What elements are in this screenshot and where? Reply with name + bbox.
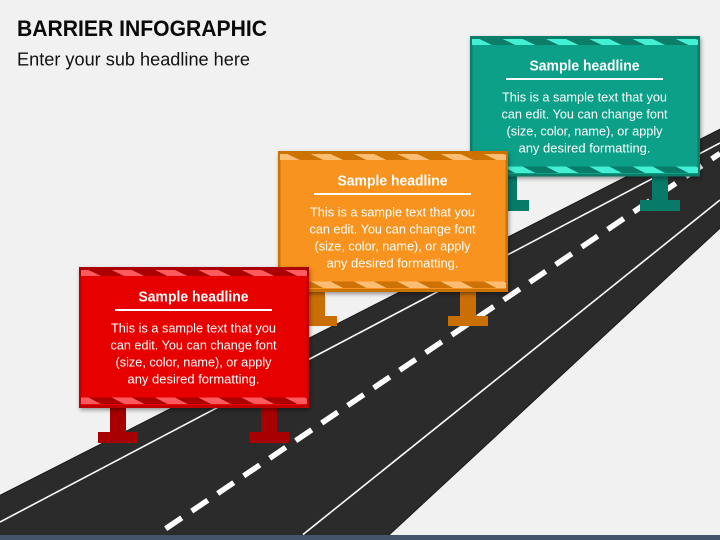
board — [79, 267, 309, 408]
body text: (size, color, name), or apply — [116, 354, 272, 369]
road surface — [0, 124, 720, 537]
dashed centre line — [166, 153, 720, 529]
barrier legs — [98, 407, 289, 443]
bottom band — [280, 282, 506, 288]
headline rule — [314, 193, 471, 195]
headline: Sample headline — [338, 174, 448, 190]
top hazard stripes — [267, 154, 516, 160]
board — [470, 36, 700, 176]
body text: This is a sample text that you — [111, 320, 276, 335]
board face — [82, 276, 306, 405]
title: BARRIER INFOGRAPHIC — [17, 16, 267, 41]
upper lane edge line — [0, 143, 720, 522]
top band — [79, 267, 309, 276]
body text: any desired formatting. — [518, 140, 650, 155]
panel: green barrier — [459, 36, 708, 211]
board face — [472, 45, 698, 174]
body text: This is a sample text that you — [310, 204, 475, 219]
panel: orange barrier — [267, 151, 516, 326]
bottom hazard stripes — [508, 166, 698, 173]
panel: red barrier — [68, 267, 317, 443]
body text: can edit. You can change font — [502, 106, 668, 121]
subtitle: Enter your sub headline here — [17, 50, 250, 70]
headline rule — [506, 78, 663, 80]
body text — [110, 320, 277, 386]
body text: (size, color, name), or apply — [314, 238, 471, 253]
top hazard stripes — [68, 270, 317, 276]
board — [278, 151, 508, 292]
barrier legs — [489, 176, 680, 211]
top hazard stripes — [459, 39, 708, 45]
headline rule — [115, 309, 272, 311]
headline: Sample headline — [138, 290, 248, 306]
body text: This is a sample text that you — [502, 89, 667, 104]
board face — [280, 160, 506, 289]
body text — [310, 204, 476, 270]
lower lane edge line — [303, 200, 720, 534]
bottom band — [81, 398, 307, 404]
headline: Sample headline — [530, 58, 640, 74]
body text: any desired formatting. — [326, 255, 458, 270]
bottom band — [472, 166, 698, 173]
body text — [502, 89, 668, 155]
body text: can edit. You can change font — [110, 337, 277, 352]
barrier legs — [297, 291, 488, 326]
bottom bar — [0, 535, 720, 540]
road — [0, 124, 720, 537]
body text: (size, color, name), or apply — [506, 123, 663, 138]
body text: any desired formatting. — [128, 371, 260, 386]
body text: can edit. You can change font — [310, 221, 476, 236]
bottom hazard stripes — [311, 282, 506, 288]
bottom hazard stripes — [68, 398, 317, 404]
